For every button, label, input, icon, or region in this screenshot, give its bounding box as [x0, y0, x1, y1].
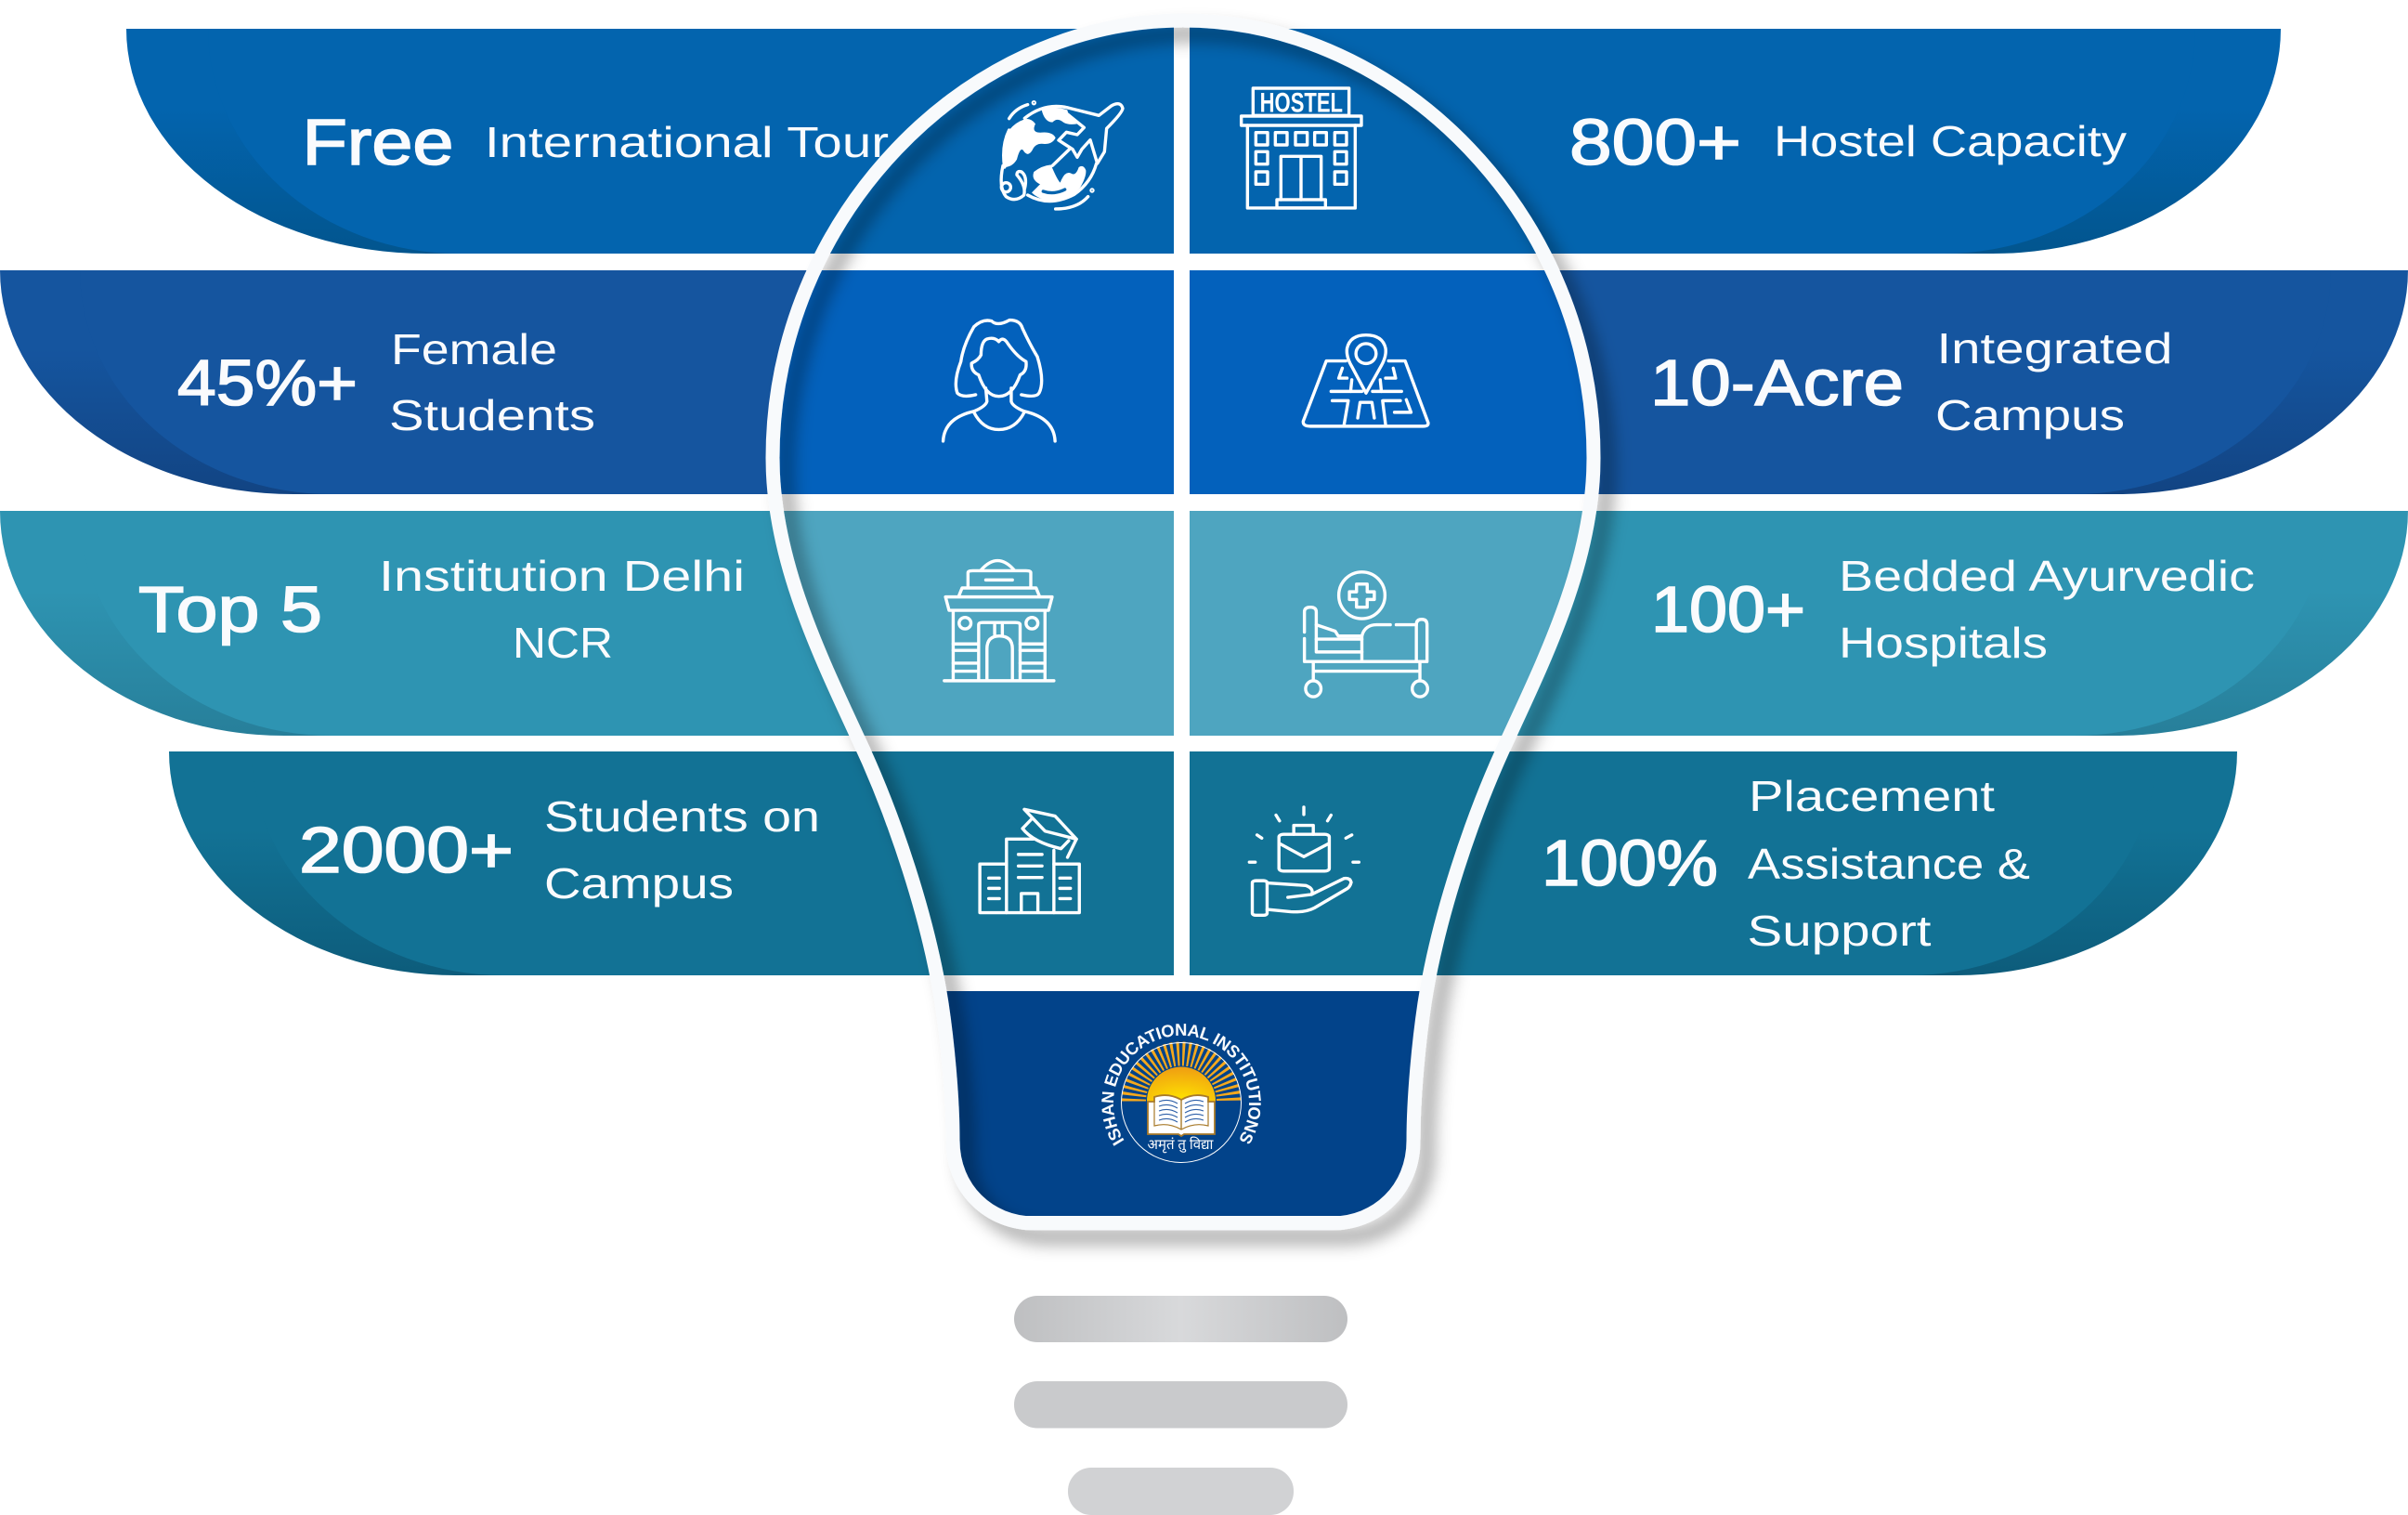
label: Bedded Ayurvedic Hospitals	[1839, 552, 2255, 667]
logo ring text: ISHAN EDUCATIONAL INSTITUTIONS	[1101, 1024, 1261, 1146]
panel: row 3 Institution Delhi NCR and Ayurvedic Hospitals	[0, 511, 2408, 736]
label: Integrated Campus	[1935, 324, 2173, 439]
icon: India Gate monument	[944, 561, 1054, 681]
bulb base pill 1	[1014, 1296, 1347, 1342]
icon: campus map pin	[1303, 335, 1428, 426]
icon: globe and plane	[1001, 102, 1123, 209]
label: Institution Delhi NCR: Institution Delhi	[379, 552, 745, 600]
icon: hostel building: HOSTEL	[1260, 88, 1343, 119]
label: Placement Assistance and Support	[1748, 772, 2030, 955]
label: Integrated Campus: Integrated	[1937, 324, 2173, 372]
panel: row 4 Students on Campus and Placement Assistance	[169, 751, 2237, 975]
icon: hostel building	[1242, 88, 1361, 208]
stat: 10-Acre: 10-Acre	[1650, 346, 1904, 419]
bulb base pill 2	[1014, 1381, 1347, 1429]
bulb outline	[773, 20, 1594, 1223]
panel: row 2 Female Students and Integrated Campus	[0, 270, 2408, 494]
logo sun disc	[1147, 1067, 1216, 1102]
label: Placement Assistance and Support: Assistance &	[1748, 840, 2030, 888]
label: Bedded Ayurvedic Hospitals: Hospitals	[1839, 619, 2048, 667]
label: Institution Delhi NCR	[379, 552, 745, 667]
label: Placement Assistance and Support: Placement	[1749, 772, 1995, 820]
stat: Free: Free	[303, 106, 453, 178]
logo motto: अमृतं तु विद्या	[1148, 1137, 1215, 1156]
bulb interior colour cells	[780, 28, 1586, 1216]
icon: college building with graduation cap	[980, 809, 1079, 913]
label: Students on Campus: Students on	[544, 792, 820, 841]
label: Female Students	[389, 325, 595, 439]
logo open book	[1148, 1095, 1215, 1136]
label: Integrated Campus: Campus	[1935, 391, 2125, 439]
logo inner ring	[1122, 1042, 1241, 1163]
label: Hostel Capacity: Hostel Capacity	[1774, 117, 2127, 165]
label: Institution Delhi NCR: NCR	[513, 619, 613, 667]
panel: row 1 International Tour and Hostel Capacity	[126, 29, 2281, 254]
icon: placement hand with briefcase	[1249, 807, 1359, 915]
stat: 45%+: 45%+	[177, 346, 358, 419]
icon: female student	[944, 320, 1055, 441]
stat: 800+: 800+	[1569, 106, 1741, 178]
label: Students on Campus	[544, 792, 820, 908]
bulb base pill 3	[1068, 1468, 1294, 1515]
stat: 100%: 100%	[1542, 827, 1718, 899]
label: Female Students: Students	[389, 391, 595, 439]
label: Placement Assistance and Support: Support	[1748, 907, 1932, 955]
logo sun rays	[1134, 1053, 1229, 1102]
label: Bedded Ayurvedic Hospitals: Bedded Ayurvedic	[1839, 552, 2255, 600]
label: International Tour: International Tour	[485, 118, 889, 166]
label: Female Students: Female	[391, 325, 557, 373]
stat: 2000+: 2000+	[299, 814, 514, 886]
icon: hospital bed	[1305, 572, 1427, 697]
logo: Ishan Educational Institutions emblem	[1101, 1024, 1261, 1163]
label: Students on Campus: Campus	[544, 859, 734, 908]
stat: Top 5: Top 5	[138, 573, 322, 646]
stat: 100+: 100+	[1651, 573, 1805, 646]
